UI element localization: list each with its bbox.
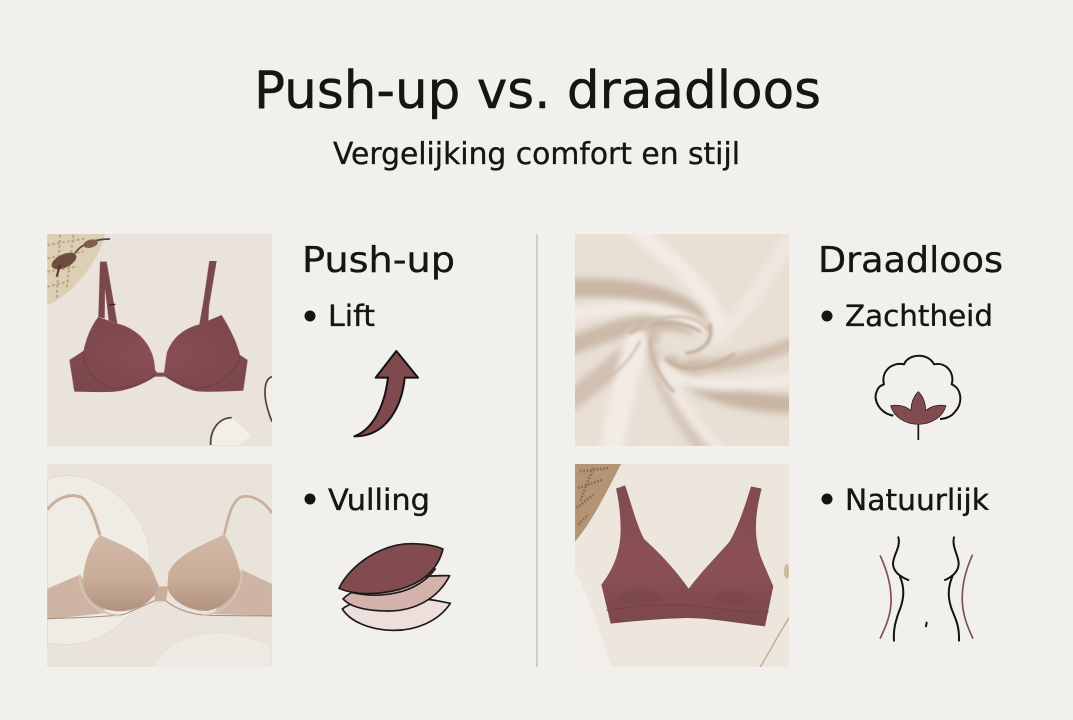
bullet: Lift: Lift [328,299,375,333]
photo: dark red push-up bra [47,233,272,446]
bullet: Lift [304,299,375,333]
heading: Push-up: Push-up [302,240,455,281]
bullet: Vulling: Vulling [328,483,430,517]
photo: wireless bra [575,463,790,668]
title: Push-up vs. draadloos [254,61,821,121]
column: Draadloos [818,240,1003,641]
subtitle: Vergelijking comfort en stijl [333,137,740,172]
bullet: Zachtheid: Zachtheid [845,299,993,333]
bullet: Natuurlijk: Natuurlijk [845,483,989,517]
heading: Draadloos: Draadloos [818,240,1003,281]
photo: nude push-up bra [47,464,272,667]
icon: stacked padding layers [339,544,450,630]
icon: cotton flower [876,356,960,440]
photo: swirled fabric [575,234,789,446]
icon: curved up arrow [354,351,418,436]
icon: natural body silhouette [880,537,973,641]
divider [536,234,538,667]
column: Push-up [302,240,455,630]
